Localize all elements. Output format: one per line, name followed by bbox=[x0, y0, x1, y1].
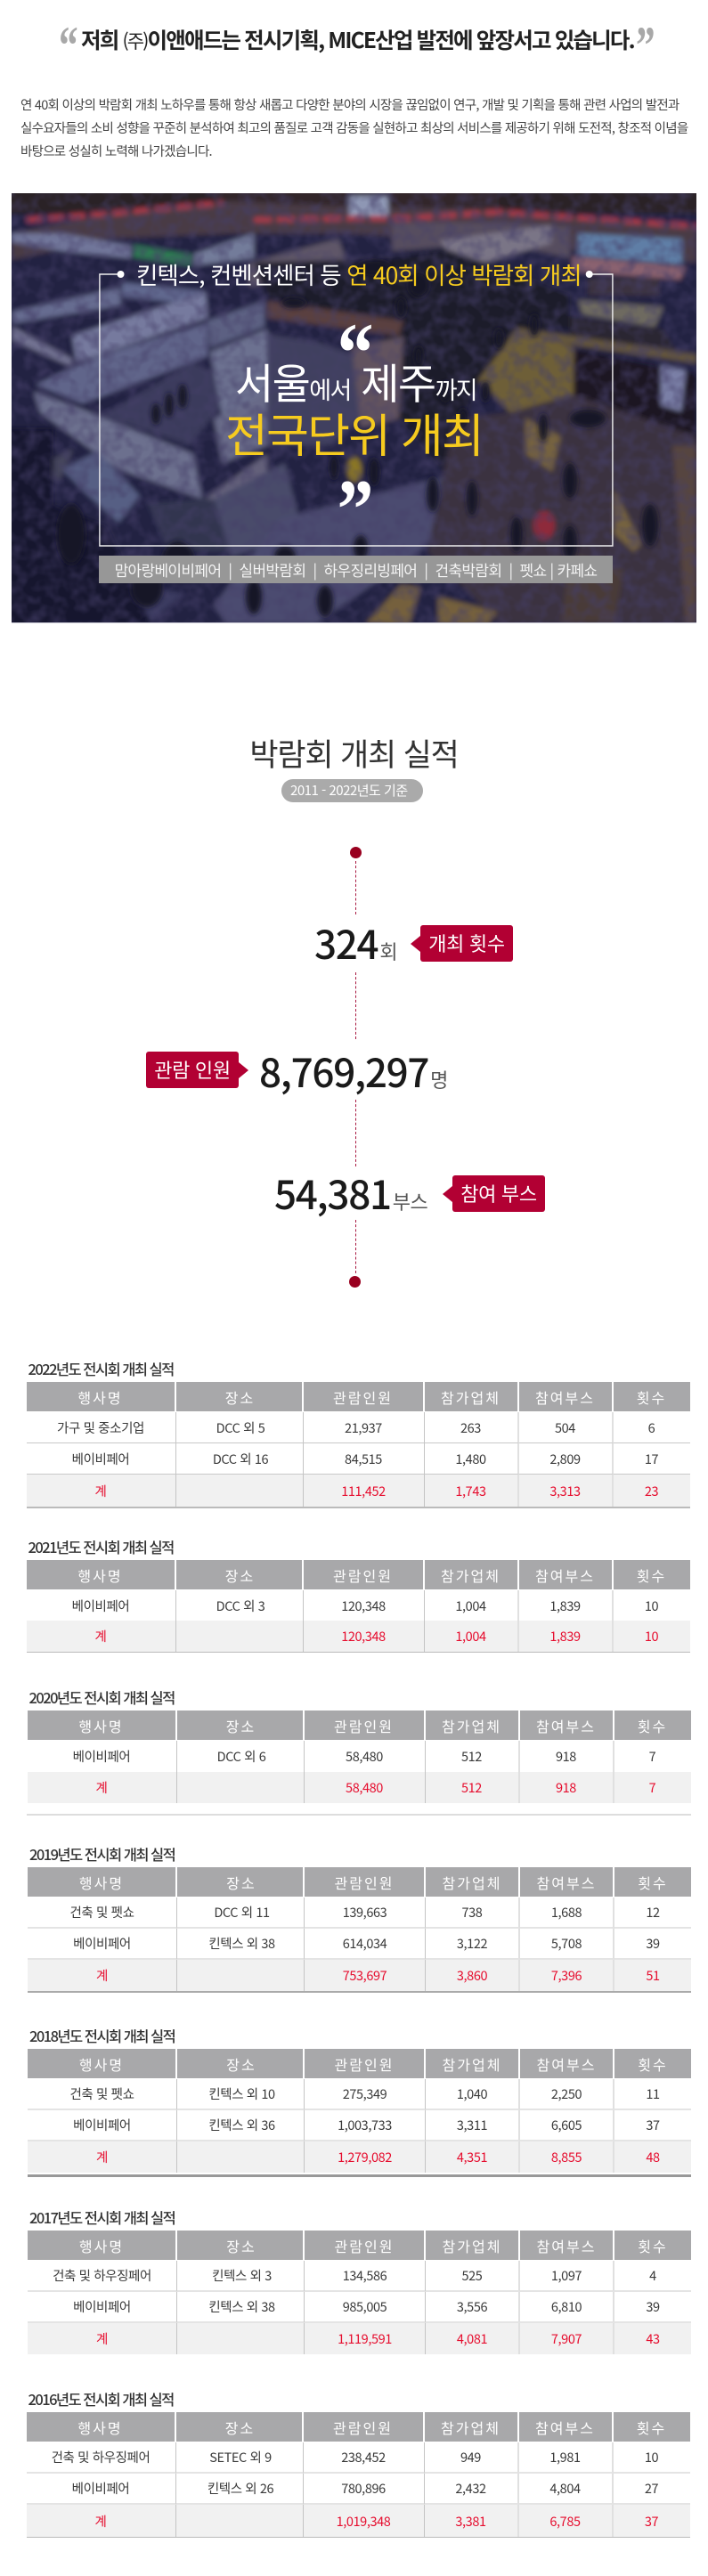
tag: booths bbox=[452, 1175, 545, 1212]
stat: booths: 54,381부스 bbox=[274, 1164, 427, 1221]
table: 2017: 킨텍스 외 38 bbox=[208, 2297, 275, 2316]
table: 2020: 58,480 bbox=[346, 1747, 383, 1766]
table: 2022: DCC 외 5 bbox=[216, 1418, 264, 1437]
table: 2017: 참가업체 bbox=[443, 2235, 501, 2256]
table: 2018: 8,855 bbox=[551, 2148, 582, 2166]
table: 2021: 10 bbox=[645, 1596, 658, 1615]
table: 2022: 1,743 bbox=[455, 1482, 486, 1499]
table: 2020: 7 bbox=[649, 1747, 655, 1766]
table: 2018: 1,003,733 bbox=[338, 2116, 392, 2134]
table: 2020: DCC 외 6 bbox=[217, 1747, 265, 1766]
table: 2016: 건축 및 하우징페어 bbox=[52, 2448, 150, 2466]
table: 2022: 참가업체 bbox=[441, 1386, 500, 1407]
table: 2019 bbox=[28, 1867, 691, 1993]
table: 2021: 횟수 bbox=[637, 1564, 666, 1585]
table: 2017: 행사명 bbox=[79, 2235, 124, 2256]
table: 2020: 58,480 bbox=[346, 1778, 383, 1797]
table: 2019: 행사명 bbox=[79, 1872, 124, 1893]
table: 2019: 614,034 bbox=[343, 1934, 387, 1953]
table: 2017: 134,586 bbox=[343, 2266, 387, 2285]
text block: introduction: 연 40회 이상의 박람회 개최 노하우를 통해 항상 새롭고 다양한 분야의 시장을 끊임없이 연구, 개발 및 기획을 통해 관련 사업의 발전과 bbox=[20, 95, 680, 114]
table: 2020: 횟수 bbox=[638, 1715, 667, 1736]
tag: visitors: 관람 인원 bbox=[154, 1055, 231, 1084]
table: 2019: 킨텍스 외 38 bbox=[208, 1934, 275, 1953]
panel: 2022 results bbox=[27, 1358, 690, 1508]
table: 2019: 횟수 bbox=[638, 1872, 668, 1893]
table: 2021: 베이비페어 bbox=[72, 1596, 129, 1615]
table: 2021: 120,348 bbox=[341, 1627, 386, 1646]
heading text: 저희 (주)이앤애드는 전시기획, MICE산업 발전에 앞장서고 있습니다. bbox=[81, 24, 634, 55]
table: 2019: 베이비페어 bbox=[73, 1934, 131, 1953]
icon: closing quote: ” bbox=[636, 16, 655, 75]
table: 2020: 918 bbox=[556, 1778, 576, 1797]
heading: 2017: 2017년도 전시회 개최 실적 bbox=[29, 2206, 175, 2228]
panel: hero photo banner bbox=[12, 193, 696, 623]
table: 2018: 2,250 bbox=[551, 2084, 582, 2103]
table: 2016: 6,785 bbox=[549, 2511, 581, 2531]
heading: 2021: 2021년도 전시회 개최 실적 bbox=[28, 1536, 174, 1557]
text block: introduction bbox=[20, 95, 688, 160]
table: 2016: 참여부스 bbox=[535, 2417, 595, 2438]
table: 2017: 525 bbox=[462, 2266, 482, 2285]
table: 2016: 장소 bbox=[225, 2417, 255, 2438]
table: 2016: 1,019,348 bbox=[337, 2511, 390, 2531]
table: 2018: 관람인원 bbox=[335, 2053, 394, 2075]
table: 2022: 관람인원 bbox=[333, 1386, 393, 1407]
table: 2016: SETEC 외 9 bbox=[209, 2448, 272, 2466]
table: 2022: 23 bbox=[645, 1482, 658, 1499]
table: 2017: 건축 및 하우징페어 bbox=[53, 2266, 151, 2285]
timeline start dot bbox=[349, 846, 362, 858]
panel: 2016 results bbox=[27, 2388, 690, 2538]
table: 2021: 장소 bbox=[225, 1564, 255, 1585]
table: 2017: 1,119,591 bbox=[338, 2329, 392, 2348]
table: 2021: 계 bbox=[95, 1627, 106, 1646]
table: 2019: 5,708 bbox=[551, 1934, 582, 1953]
table: 2019: 51 bbox=[646, 1966, 660, 1985]
panel: 2017 results bbox=[28, 2206, 691, 2354]
table: 2019: DCC 외 11 bbox=[214, 1903, 270, 1922]
timeline end dot bbox=[349, 1275, 361, 1288]
table: 2022: 베이비페어 bbox=[72, 1450, 129, 1467]
table: 2022: 17 bbox=[645, 1450, 658, 1467]
table: 2022: 263 bbox=[460, 1418, 481, 1437]
table: 2017: 4 bbox=[649, 2266, 656, 2285]
table: 2018: 킨텍스 외 10 bbox=[208, 2084, 275, 2103]
table: 2018: 계 bbox=[96, 2148, 108, 2166]
heading: venue line: 킨텍스, 컨벤션센터 등 연 40회 이상 박람회 개최 bbox=[136, 256, 582, 291]
table: 2022: 가구 및 중소기업 bbox=[57, 1418, 144, 1437]
table: 2016: 3,381 bbox=[455, 2511, 486, 2531]
table: 2017: 계 bbox=[96, 2329, 108, 2348]
table: 2016: 베이비페어 bbox=[72, 2479, 129, 2498]
table: 2018: 3,311 bbox=[457, 2116, 487, 2134]
table: 2018: 횟수 bbox=[638, 2053, 668, 2075]
table: 2018: 장소 bbox=[226, 2053, 256, 2075]
heading: nationwide: 전국단위 개최 bbox=[225, 399, 483, 466]
table: 2022: 1,480 bbox=[455, 1450, 486, 1467]
stat: visitors: 8,769,297명 bbox=[259, 1042, 448, 1099]
table: 2020 bbox=[28, 1711, 691, 1803]
panel: 2021 results bbox=[27, 1536, 690, 1653]
table: 2022: 장소 bbox=[225, 1386, 255, 1407]
table: 2016: 계 bbox=[95, 2511, 106, 2531]
table: 2020: 베이비페어 bbox=[73, 1747, 130, 1766]
table: 2019: 참가업체 bbox=[443, 1872, 501, 1893]
table: 2018: 1,040 bbox=[457, 2084, 487, 2103]
table: 2018: 건축 및 펫쇼 bbox=[69, 2084, 134, 2103]
text block: introduction: 바탕으로 성실히 노력해 나가겠습니다. bbox=[20, 142, 212, 160]
table: 2022: 행사명 bbox=[77, 1386, 123, 1407]
table: 2016: 참가업체 bbox=[441, 2417, 500, 2438]
table: 2018: 4,351 bbox=[457, 2148, 487, 2166]
table: 2019: 1,688 bbox=[551, 1903, 582, 1922]
table: 2018: 37 bbox=[646, 2116, 660, 2134]
table: 2018: 48 bbox=[646, 2148, 660, 2166]
table: 2020: 7 bbox=[649, 1778, 655, 1797]
table: 2016: 27 bbox=[645, 2479, 658, 2498]
heading: 2020: 2020년도 전시회 개최 실적 bbox=[28, 1686, 175, 1708]
tag: event count bbox=[420, 925, 513, 962]
table: 2022: 111,452 bbox=[341, 1482, 386, 1499]
table: 2017: 7,907 bbox=[551, 2329, 582, 2348]
table: 2021: 참가업체 bbox=[441, 1564, 500, 1585]
table: 2020: 512 bbox=[461, 1747, 482, 1766]
table: 2018: 1,279,082 bbox=[338, 2148, 392, 2166]
table: 2017: 4,081 bbox=[457, 2329, 487, 2348]
table: 2022: 21,937 bbox=[345, 1418, 382, 1437]
table: 2022: 6 bbox=[648, 1418, 655, 1437]
tag: booths: 참여 부스 bbox=[460, 1179, 537, 1207]
badge: base years bbox=[281, 779, 423, 802]
table: 2022: 84,515 bbox=[345, 1450, 382, 1467]
table: 2022: 3,313 bbox=[549, 1482, 581, 1499]
table: 2017: 관람인원 bbox=[335, 2235, 394, 2256]
panel: 2020 results bbox=[28, 1686, 691, 1803]
table: 2019: 3,122 bbox=[457, 1934, 487, 1953]
stat: event count: 324회 bbox=[314, 914, 397, 971]
table: 2020: 918 bbox=[556, 1747, 576, 1766]
table: 2021: 행사명 bbox=[77, 1564, 123, 1585]
icon: opening quote large: “ bbox=[338, 305, 373, 400]
table: 2019: 건축 및 펫쇼 bbox=[69, 1903, 134, 1922]
table: 2017: 참여부스 bbox=[537, 2235, 596, 2256]
table: 2021: 1,839 bbox=[549, 1596, 581, 1615]
table: 2016: 37 bbox=[645, 2511, 658, 2531]
heading: exhibition results: 박람회 개최 실적 bbox=[249, 730, 459, 776]
table: 2016: 4,804 bbox=[549, 2479, 581, 2498]
frame: outline around headline bbox=[99, 271, 614, 547]
table: 2021: DCC 외 3 bbox=[216, 1596, 264, 1615]
table: 2018 bbox=[28, 2049, 691, 2173]
table: 2019: 12 bbox=[646, 1903, 660, 1922]
icon: closing quote large: ” bbox=[338, 462, 373, 557]
table: 2016: 2,432 bbox=[455, 2479, 486, 2498]
table: 2022: 계 bbox=[95, 1482, 106, 1499]
table: 2018: 11 bbox=[646, 2084, 660, 2103]
table: 2022: 2,809 bbox=[549, 1450, 581, 1467]
heading: 2019: 2019년도 전시회 개최 실적 bbox=[29, 1843, 175, 1865]
table: 2016: 행사명 bbox=[77, 2417, 123, 2438]
tag: visitors bbox=[146, 1052, 239, 1088]
table: 2017: 베이비페어 bbox=[73, 2297, 131, 2316]
table: 2018: 행사명 bbox=[79, 2053, 124, 2075]
tag: event count: 개최 횟수 bbox=[428, 929, 505, 957]
texture: visual noise bbox=[12, 193, 696, 623]
table: 2016: 킨텍스 외 26 bbox=[208, 2479, 273, 2498]
table: 2018: 킨텍스 외 36 bbox=[208, 2116, 275, 2134]
table: 2017: 43 bbox=[646, 2329, 660, 2348]
heading: 2018: 2018년도 전시회 개최 실적 bbox=[29, 2025, 175, 2046]
table: 2018: 6,605 bbox=[551, 2116, 582, 2134]
table: 2021: 관람인원 bbox=[333, 1564, 393, 1585]
table: 2017: 3,556 bbox=[457, 2297, 487, 2316]
table: 2016: 10 bbox=[645, 2448, 658, 2466]
table: 2016 bbox=[27, 2412, 689, 2538]
table: 2020: 장소 bbox=[226, 1715, 256, 1736]
table: 2022: 504 bbox=[555, 1418, 575, 1437]
table: 2021: 참여부스 bbox=[535, 1564, 595, 1585]
table: 2017: 장소 bbox=[226, 2235, 256, 2256]
table: 2016: 횟수 bbox=[637, 2417, 666, 2438]
table: 2022: 참여부스 bbox=[535, 1386, 595, 1407]
table: 2016: 949 bbox=[460, 2448, 481, 2466]
table: 2020: 관람인원 bbox=[334, 1715, 394, 1736]
table: 2019: 39 bbox=[646, 1934, 660, 1953]
table: 2017: 킨텍스 외 3 bbox=[212, 2266, 272, 2285]
table: 2016: 관람인원 bbox=[333, 2417, 393, 2438]
bar: exhibition names: 맘아랑베이비페어 | 실버박람회 | 하우징리빙페어 | 건축박람회 | 펫쇼 | 카페쇼 bbox=[115, 558, 597, 581]
table: 2019: 계 bbox=[96, 1966, 108, 1985]
table: 2020: 참여부스 bbox=[536, 1715, 596, 1736]
heading: 2016: 2016년도 전시회 개최 실적 bbox=[28, 2388, 174, 2409]
table: 2019: 3,860 bbox=[457, 1966, 487, 1985]
table: 2020: 계 bbox=[96, 1778, 107, 1797]
table: 2018: 참여부스 bbox=[537, 2053, 596, 2075]
table: 2019: 관람인원 bbox=[335, 1872, 394, 1893]
table: 2019: 7,396 bbox=[551, 1966, 582, 1985]
table: 2020: 512 bbox=[461, 1778, 482, 1797]
table: 2019: 장소 bbox=[226, 1872, 256, 1893]
table: 2016: 1,981 bbox=[549, 2448, 581, 2466]
table: 2017 bbox=[28, 2231, 691, 2354]
table: 2021 bbox=[27, 1560, 689, 1653]
title: company statement bbox=[59, 16, 655, 75]
table: 2018: 275,349 bbox=[343, 2084, 387, 2103]
table: 2022: DCC 외 16 bbox=[213, 1450, 268, 1467]
table: 2016: 780,896 bbox=[341, 2479, 386, 2498]
table: 2017: 6,810 bbox=[551, 2297, 582, 2316]
chart: results timeline bbox=[146, 847, 545, 1288]
table: 2021: 1,004 bbox=[455, 1596, 486, 1615]
panel: 2019 results bbox=[28, 1843, 691, 1993]
table: 2022: 횟수 bbox=[637, 1386, 666, 1407]
panel: 2018 results bbox=[28, 2025, 691, 2177]
table: 2018: 참가업체 bbox=[443, 2053, 501, 2075]
table: 2017: 1,097 bbox=[551, 2266, 582, 2285]
heading: Seoul to Jeju: 서울에서 제주까지 bbox=[235, 350, 476, 411]
table: 2017: 횟수 bbox=[638, 2235, 668, 2256]
table: 2021: 120,348 bbox=[341, 1596, 386, 1615]
badge: base years: 2011 - 2022년도 기준 bbox=[290, 781, 408, 800]
table: 2019: 738 bbox=[462, 1903, 482, 1922]
table: 2020: 참가업체 bbox=[442, 1715, 501, 1736]
table: 2021: 1,004 bbox=[455, 1627, 486, 1646]
table: 2019: 139,663 bbox=[343, 1903, 387, 1922]
table: 2017: 985,005 bbox=[343, 2297, 387, 2316]
table: 2018: 베이비페어 bbox=[73, 2116, 131, 2134]
table: 2021: 10 bbox=[645, 1627, 658, 1646]
heading: 2022: 2022년도 전시회 개최 실적 bbox=[28, 1358, 174, 1379]
table: 2020: 행사명 bbox=[78, 1715, 124, 1736]
icon: opening quote: “ bbox=[59, 16, 78, 75]
text block: introduction: 실수요자들의 소비 성향을 꾸준히 분석하여 최고의 품질로 고객 감동을 실현하고 최상의 서비스를 제공하기 위해 도전적, 창조적 이념을 bbox=[20, 118, 688, 137]
table: 2017: 39 bbox=[646, 2297, 660, 2316]
table: 2019: 참여부스 bbox=[537, 1872, 596, 1893]
table: 2022 bbox=[27, 1382, 689, 1508]
photo: exhibition hall seen from above bbox=[12, 193, 696, 623]
table: 2016: 238,452 bbox=[341, 2448, 386, 2466]
table: 2019: 753,697 bbox=[343, 1966, 387, 1985]
table: 2021: 1,839 bbox=[549, 1627, 581, 1646]
